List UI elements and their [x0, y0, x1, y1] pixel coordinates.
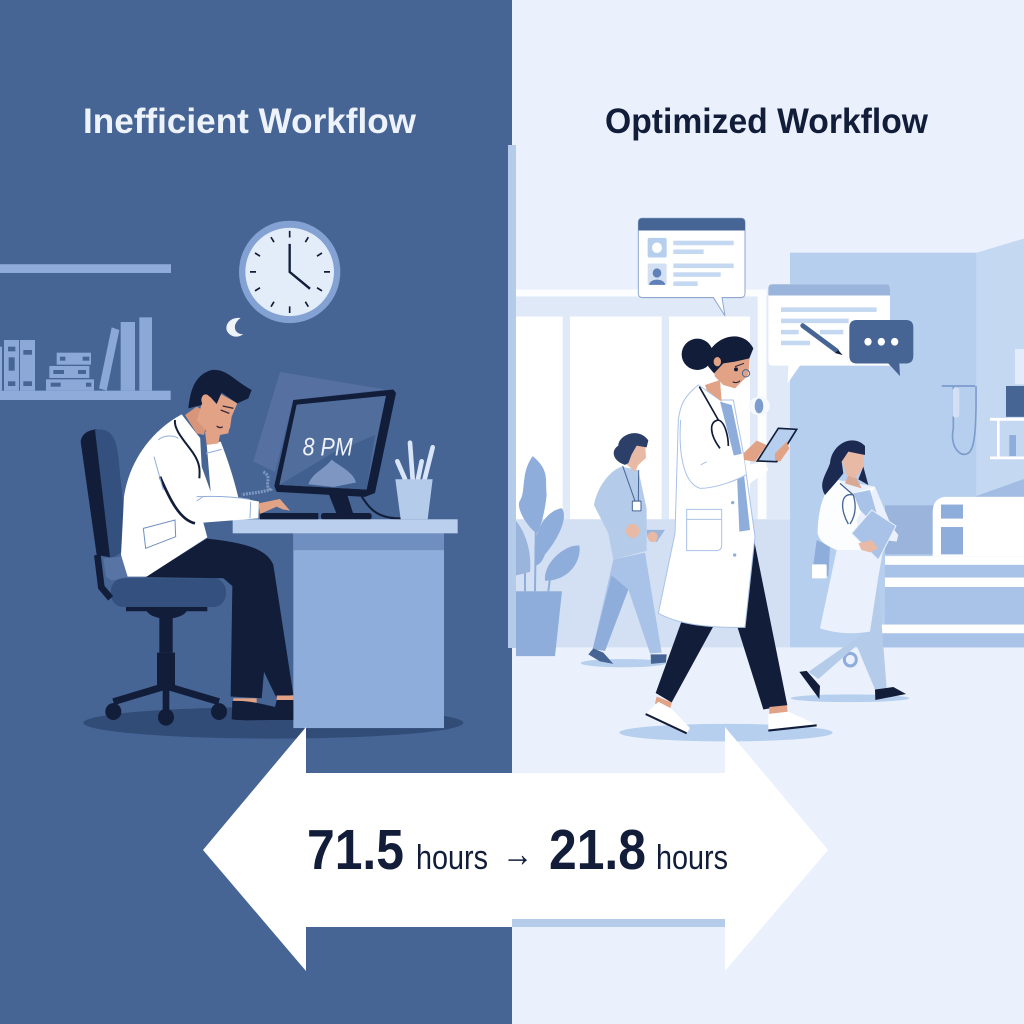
bookshelf [0, 317, 171, 400]
speech bubble: notes [768, 284, 890, 383]
value: 71.5: 71.5 [307, 818, 404, 882]
glow from monitor [253, 372, 385, 472]
ward wall [790, 239, 1024, 647]
stat: hours before and after [307, 818, 728, 882]
icon: pen [803, 326, 843, 355]
panel: optimized workflow background [512, 0, 1024, 1024]
coat pocket [143, 520, 176, 548]
third doctor legs and shoes [791, 582, 909, 702]
main doctor legs and shoes [619, 528, 833, 741]
IV hook [942, 386, 976, 454]
scene: office at night [0, 221, 463, 739]
stethoscope [840, 483, 855, 524]
wall shelf [990, 349, 1024, 458]
arrow lower edge highlight [512, 919, 725, 927]
head [705, 380, 722, 402]
icon: wall clock [239, 221, 340, 323]
main doctor with tablet [658, 336, 797, 627]
double-headed arrow [203, 727, 828, 971]
typing hand [258, 499, 290, 514]
scene: hospital [516, 218, 1024, 741]
divider strip [508, 145, 516, 648]
neck [185, 407, 208, 435]
facial features [217, 406, 233, 428]
panel: inefficient workflow background [0, 0, 512, 1024]
coat [818, 480, 898, 633]
lab coat [658, 385, 755, 627]
seated doctor [121, 370, 290, 577]
arrow: to: → [502, 833, 533, 874]
small floating icon [749, 397, 770, 415]
third doctor with clipboard [812, 440, 898, 633]
colleague walking in background [581, 433, 667, 667]
unit: hours: hours [656, 839, 728, 877]
stethoscope [699, 387, 728, 448]
chair base and seat [105, 578, 227, 726]
desk [233, 519, 458, 728]
icon: chat bubble [849, 320, 913, 376]
main doctor and third doctor upper bodies [658, 336, 898, 633]
title: optimized workflow: Optimized Workflow [605, 102, 929, 141]
unit: hours: hours [416, 839, 488, 877]
stethoscope [175, 420, 200, 478]
icon: crescent moon [226, 318, 243, 337]
pencil cup [395, 443, 433, 519]
upper shelf [0, 264, 171, 273]
title: inefficient workflow: Inefficient Workflow [83, 102, 417, 141]
monitor [242, 389, 402, 520]
screen text: 8 PM [303, 433, 353, 461]
floor shadow [83, 707, 463, 739]
lab coat [121, 414, 259, 577]
bed [844, 497, 1024, 666]
sleeve [681, 420, 746, 488]
speech bubble: patient records [638, 218, 745, 316]
potted plant [516, 456, 580, 656]
hospital wall and windows [516, 289, 790, 647]
head [845, 475, 862, 488]
tablet [757, 428, 797, 462]
scene: shelf and seated doctor upper body [0, 317, 290, 598]
doctor legs and shoes [145, 513, 318, 720]
hand on cheek [205, 422, 230, 445]
value: 21.8: 21.8 [549, 818, 646, 882]
hair [188, 370, 252, 408]
face [197, 392, 237, 433]
coat pocket [687, 509, 722, 551]
clipboard [852, 510, 896, 560]
chair back [81, 429, 128, 598]
